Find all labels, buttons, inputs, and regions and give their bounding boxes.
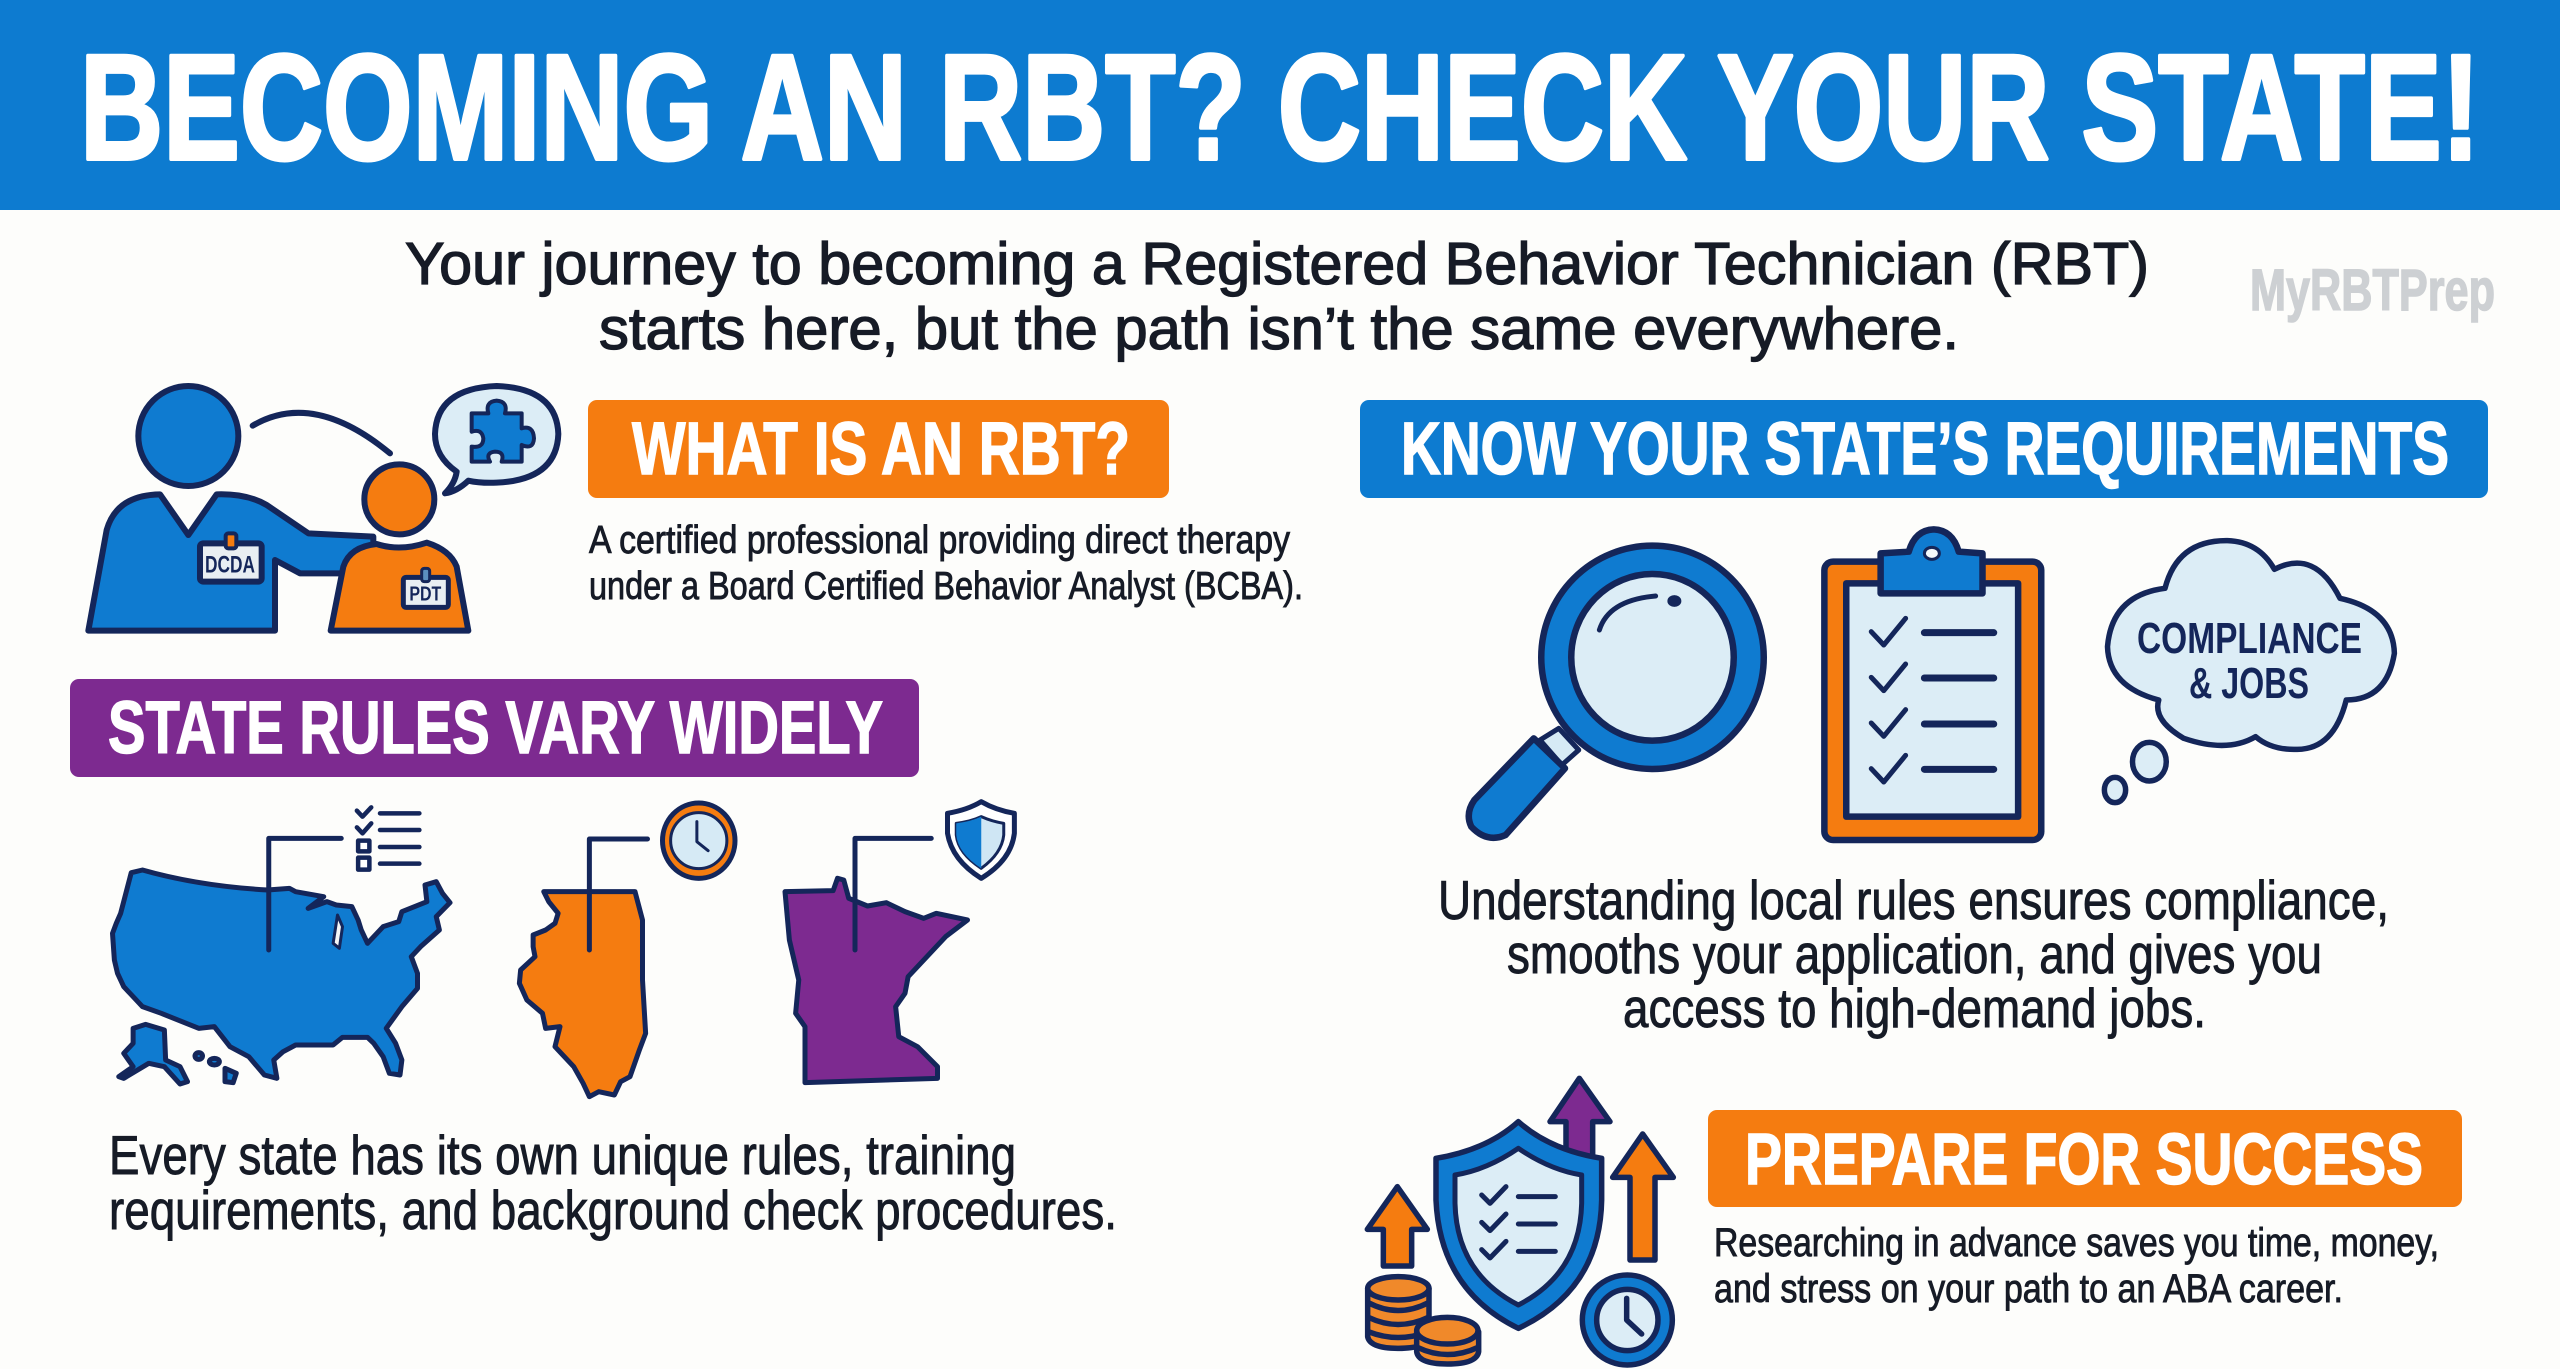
text: RBT definition xyxy=(589,519,1303,608)
heading: state rules vary: STATE RULES VARY WIDELY xyxy=(108,686,883,769)
cloud label: & JOBS xyxy=(2189,659,2309,708)
text: preparation benefits: and stress on your path to an ABA career. xyxy=(1714,1267,2343,1311)
text: RBT definition: A certified professional providing direct therapy xyxy=(589,519,1290,562)
heading: what is an RBT: WHAT IS AN RBT? xyxy=(632,407,1130,490)
text: why local rules matter: Understanding local rules ensures compliance, xyxy=(1438,869,2389,931)
text: why local rules matter xyxy=(1438,869,2389,1039)
icon: magnifying glass xyxy=(1469,546,1764,838)
text: state rules: Every state has its own unique rules, training xyxy=(109,1124,1016,1186)
icon: success shield, arrows, coins and clock xyxy=(1367,1078,1673,1365)
icon: coin stacks xyxy=(1368,1277,1479,1364)
map: Illinois xyxy=(519,892,646,1097)
cloud label xyxy=(2137,614,2362,708)
text: why local rules matter: access to high-demand jobs. xyxy=(1623,977,2206,1039)
icon: shield xyxy=(948,802,1014,878)
intro text xyxy=(405,231,2149,362)
icon: RBT with client: PDT xyxy=(409,584,441,606)
cloud label: COMPLIANCE xyxy=(2137,614,2362,663)
map: Minnesota xyxy=(785,878,968,1083)
icon: thought cloud xyxy=(2104,541,2394,803)
intro text: Your journey to becoming a Registered Behavior Technician (RBT) xyxy=(405,231,2149,297)
icon: RBT with client xyxy=(88,386,558,631)
text: why local rules matter: smooths your application, and gives you xyxy=(1507,923,2322,985)
text: preparation benefits: Researching in advance saves you time, money, xyxy=(1714,1221,2439,1265)
heading: state rules vary xyxy=(70,679,919,777)
maps and state icons xyxy=(112,802,1014,1097)
icon: clipboard xyxy=(1824,529,2041,840)
intro text: starts here, but the path isn’t the same everywhere. xyxy=(599,296,1959,362)
text: state rules xyxy=(109,1124,1117,1241)
text: preparation benefits xyxy=(1714,1221,2439,1311)
text: RBT definition: under a Board Certified Behavior Analyst (BCBA). xyxy=(589,565,1303,608)
map: United States xyxy=(112,870,450,1084)
text: state rules: requirements, and background check procedures. xyxy=(109,1179,1117,1241)
icon: RBT with client: DCDA xyxy=(205,552,255,579)
icon: clock xyxy=(662,803,735,878)
requirement icons xyxy=(1469,529,2394,840)
heading: what is an RBT xyxy=(588,400,1169,498)
icon: checklist xyxy=(357,807,419,870)
